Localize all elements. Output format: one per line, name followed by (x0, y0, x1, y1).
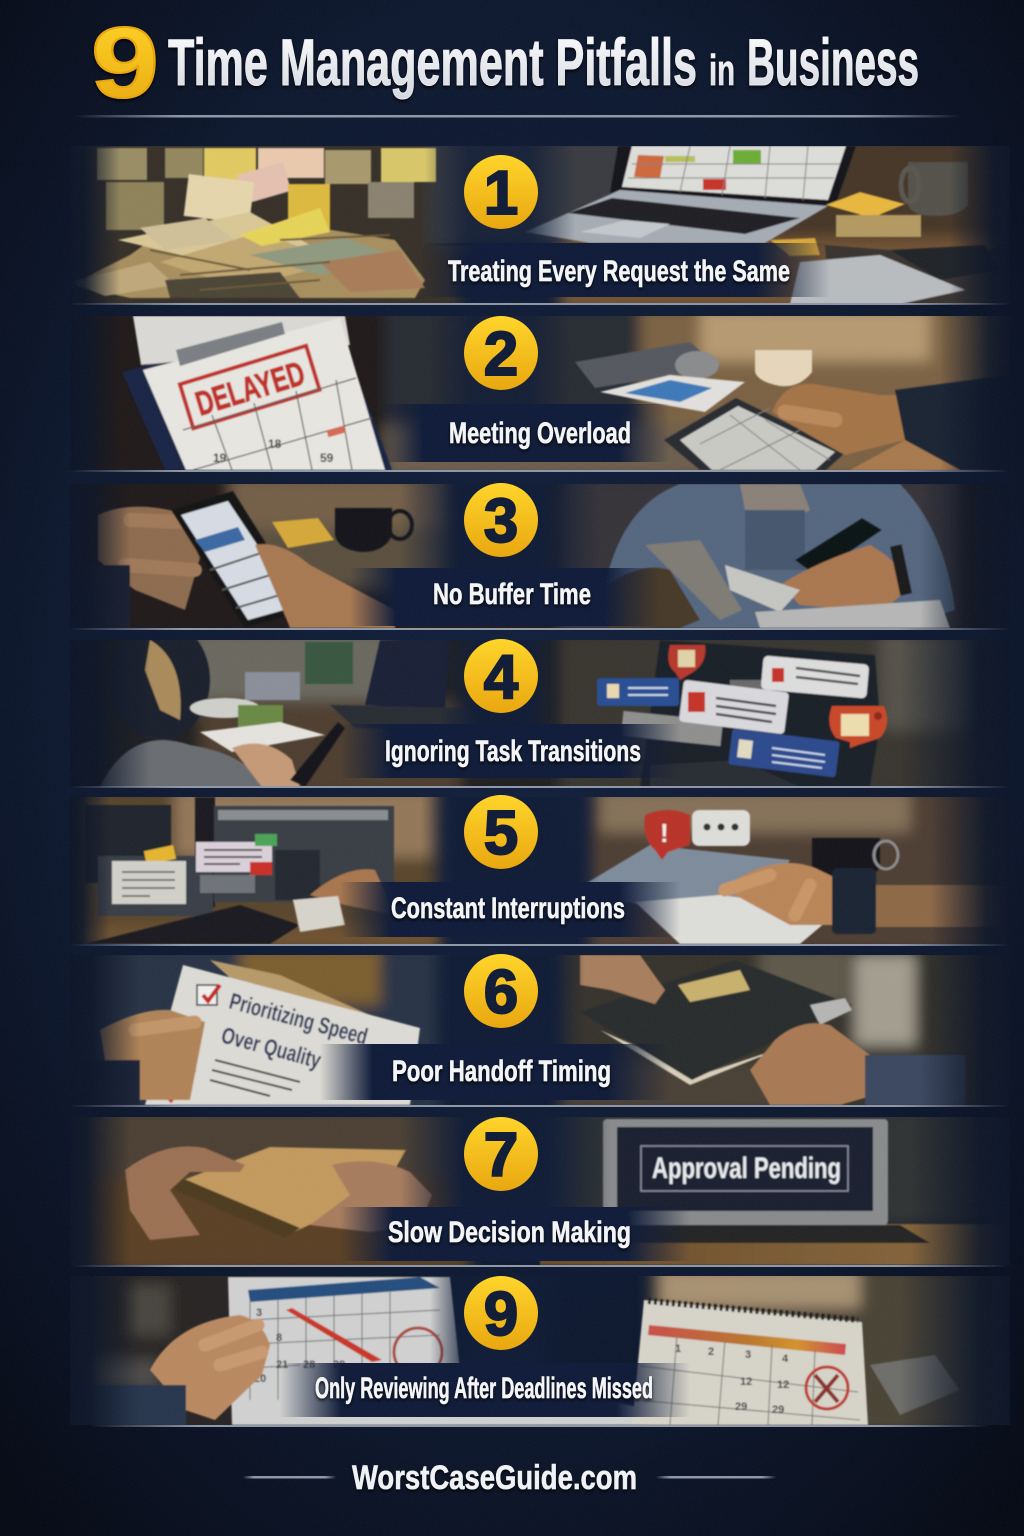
label banner 9 (280, 1363, 690, 1417)
badge 2 (464, 316, 538, 390)
centre column shade (440, 640, 565, 725)
badge 5: 5 (484, 799, 518, 868)
scene: delayed calendar clipboard and tablet: 59 (320, 451, 334, 465)
badge 1 (464, 155, 538, 229)
scene: delayed calendar clipboard and tablet: 19 (213, 451, 227, 465)
edge fade right (910, 1117, 1010, 1265)
label banner 3 (350, 568, 660, 626)
label banner 2: Meeting Overload (449, 417, 631, 450)
footer line right (656, 1476, 776, 1478)
edge fade right (920, 955, 1010, 1105)
badge 3 (464, 483, 538, 557)
scene: notifications over laptop (100, 640, 888, 787)
scene: checklist and folder handoff (70, 955, 965, 1105)
label banner 4: Ignoring Task Transitions (385, 735, 641, 768)
label banner 5: Constant Interruptions (391, 892, 625, 925)
blurred backdrop 6 (60, 945, 1020, 1115)
panel 1: Treating Every Request the Same (77, 146, 997, 304)
scene: wall and desk calendars: 29 (735, 1401, 747, 1413)
footer line left (243, 1476, 336, 1478)
label banner 6 (320, 1044, 670, 1100)
blurred backdrop 3 (99, 484, 968, 628)
panel 9: Only Reviewing After Deadlines Missed (60, 1266, 1020, 1435)
panel 4: Ignoring Task Transitions (70, 640, 973, 787)
blurred backdrop 5 (60, 787, 1020, 954)
blurred backdrop 1 (88, 146, 995, 304)
scene: wall and desk calendars: 3 (745, 1349, 751, 1361)
panel 5: Constant Interruptions (60, 787, 1020, 954)
label banner 5 (340, 882, 680, 937)
badge 4: 4 (484, 643, 519, 712)
badge 5 (464, 795, 538, 869)
scene: checklist and folder handoff: Over Quality (219, 1022, 324, 1073)
blurred backdrop 9 (60, 1266, 1020, 1435)
scene: wall and desk calendars: 12 (777, 1379, 789, 1391)
label banner 6: Poor Handoff Timing (392, 1055, 611, 1088)
scene: wall and desk calendars (78, 1277, 960, 1425)
blurred backdrop 7 (60, 1107, 1020, 1275)
scene: envelope handoff and approval monitor (125, 1119, 1010, 1265)
centre column shade (405, 484, 587, 568)
centre column shade (425, 955, 585, 1045)
centre column shade (420, 797, 600, 887)
label banner 1 (420, 243, 830, 297)
title numeral 9: 9 (91, 7, 159, 119)
label banner 1: Treating Every Request the Same (448, 255, 790, 288)
label banner 9: Only Reviewing After Deadlines Missed (315, 1372, 653, 1405)
scene: delayed calendar clipboard and tablet: 18 (268, 437, 282, 451)
scene: wall and desk calendars: 12 (740, 1376, 752, 1388)
panel 3: No Buffer Time (70, 484, 980, 628)
centre column shade (446, 316, 554, 404)
scene: wall and desk calendars: 20 (254, 1373, 266, 1385)
scene: delayed calendar clipboard and tablet (122, 316, 1010, 470)
centre column shade (400, 1117, 610, 1212)
scene: wall and desk calendars: 29 (772, 1404, 784, 1416)
badge 7: 7 (484, 1121, 518, 1190)
edge fade left (70, 640, 150, 787)
edge fade left (70, 1117, 130, 1265)
scene: screens, chat bubbles and working hand: ! (660, 818, 669, 848)
title word in: in (709, 46, 735, 95)
blurred backdrop 4 (114, 640, 973, 786)
edge fade left (70, 797, 110, 944)
scene: checklist and folder handoff: Prioritizing Speed (227, 988, 371, 1050)
edge fade left (70, 146, 120, 304)
edge fade left (70, 955, 140, 1105)
scene: delayed calendar clipboard and tablet: DELAYED (191, 354, 309, 423)
badge 6 (464, 954, 538, 1028)
badge 9: 9 (484, 1280, 518, 1349)
edge fade right (930, 797, 1010, 944)
panel 7: Slow Decision Making (60, 1107, 1020, 1275)
edge fade right (920, 484, 1010, 628)
blurred backdrop 2 (96, 316, 996, 470)
badge 4 (464, 639, 538, 713)
edge fade right (900, 1276, 1010, 1425)
label banner 7 (340, 1207, 690, 1261)
scene: wall and desk calendars: 8 (276, 1332, 282, 1344)
scene: screens, chat bubbles and working hand (85, 797, 1008, 944)
scene: envelope handoff and approval monitor: Approval Pending (652, 1152, 841, 1185)
label banner 3: No Buffer Time (433, 578, 591, 611)
label banner 2 (380, 404, 670, 462)
label banner 4 (340, 724, 680, 778)
edge fade right (950, 146, 1010, 304)
scene: wall and desk calendars: 3 (256, 1307, 262, 1319)
badge 2: 2 (484, 320, 518, 389)
badge 9 (464, 1276, 538, 1350)
edge fade left (70, 316, 106, 470)
centre column shade (425, 146, 575, 246)
scene: sticky-note pile and laptop calendar (70, 146, 1010, 304)
edge fade left (70, 484, 130, 628)
title text start: Time Management Pitfalls (168, 25, 697, 99)
edge fade right (900, 640, 1010, 787)
scene: wall and desk calendars: 21 (276, 1359, 288, 1371)
badge 7 (464, 1117, 538, 1191)
edge fade right (940, 316, 1010, 470)
panel 2: Meeting Overload (74, 316, 997, 470)
scene: wall and desk calendars: 4 (782, 1353, 789, 1365)
scene: hands with phones and tablet (70, 484, 955, 628)
panel 6: Poor Handoff Timing (60, 945, 1020, 1115)
centre column shade (430, 1276, 570, 1366)
badge 1: 1 (484, 159, 518, 228)
edge fade left (70, 1276, 140, 1425)
scene: wall and desk calendars: 2 (708, 1346, 714, 1358)
badge 6: 6 (484, 958, 518, 1027)
scene: wall and desk calendars: 1 (675, 1343, 681, 1355)
badge 3: 3 (484, 487, 518, 556)
title (91, 7, 919, 119)
scene: wall and desk calendars: 28 (303, 1359, 315, 1371)
footer website: WorstCaseGuide.com (352, 1459, 637, 1497)
label banner 7: Slow Decision Making (388, 1216, 631, 1249)
scene: wall and desk calendars: 29 (333, 1359, 345, 1371)
